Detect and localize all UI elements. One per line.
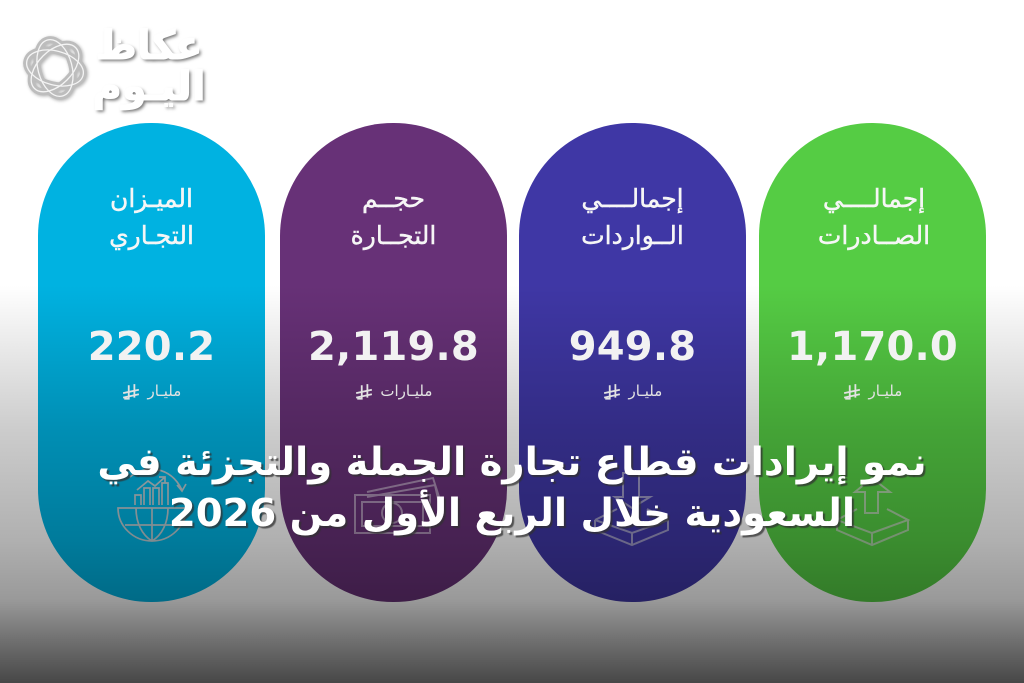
panel: trade volume: [280, 123, 507, 602]
icon: arrow out of box: [836, 477, 910, 546]
heading: total imports: [581, 184, 684, 250]
title: نمو إيرادات قطاع تجارة الجملة والتجزئة في: [97, 440, 927, 485]
panel: total imports: [519, 123, 746, 602]
value: 949.8: 949.8: [569, 324, 696, 370]
unit: billion riyal: مليـار: [629, 382, 662, 400]
heading: total exports: إجمالــــي: [823, 184, 925, 213]
icon: globe with chart: [117, 468, 187, 542]
icon: banknotes: [354, 477, 440, 534]
heading: total imports: إجمالــــي: [581, 184, 684, 213]
unit: billion riyal: [123, 382, 181, 400]
logo wordmark: [92, 23, 206, 114]
heading: trade balance: التجـاري: [109, 221, 194, 250]
heading: trade volume: حجــم: [362, 184, 425, 213]
logo: [22, 23, 206, 114]
icon: arrow into box: [594, 472, 669, 546]
value: 1,170.0: 1,170.0: [787, 324, 958, 370]
unit: billions riyal: [356, 382, 432, 400]
unit: billion riyal: [604, 382, 662, 400]
panel: total exports: [759, 123, 986, 602]
panel: trade balance: [38, 123, 265, 602]
logo wordmark: اليـوم: [92, 64, 206, 110]
title: [97, 440, 927, 538]
heading: trade balance: الميـزان: [110, 184, 193, 213]
value: 220.2: 220.2: [88, 324, 215, 370]
heading: total exports: الصــادرات: [818, 221, 930, 250]
title: السعودية خلال الربع الأول من 2026: [169, 491, 855, 536]
unit: billion riyal: مليـار: [869, 382, 902, 400]
value: 2,119.8: 2,119.8: [308, 324, 479, 370]
unit: billions riyal: مليـارات: [380, 382, 432, 400]
heading: trade volume: [351, 184, 436, 250]
unit: billion riyal: [844, 382, 902, 400]
heading: total exports: [818, 184, 930, 250]
heading: trade volume: التجــارة: [351, 221, 436, 250]
logo wordmark: عكاظ: [95, 23, 203, 69]
logo mark: [22, 36, 90, 102]
heading: trade balance: [109, 184, 194, 250]
unit: billion riyal: مليـار: [148, 382, 181, 400]
heading: total imports: الــواردات: [581, 221, 684, 250]
